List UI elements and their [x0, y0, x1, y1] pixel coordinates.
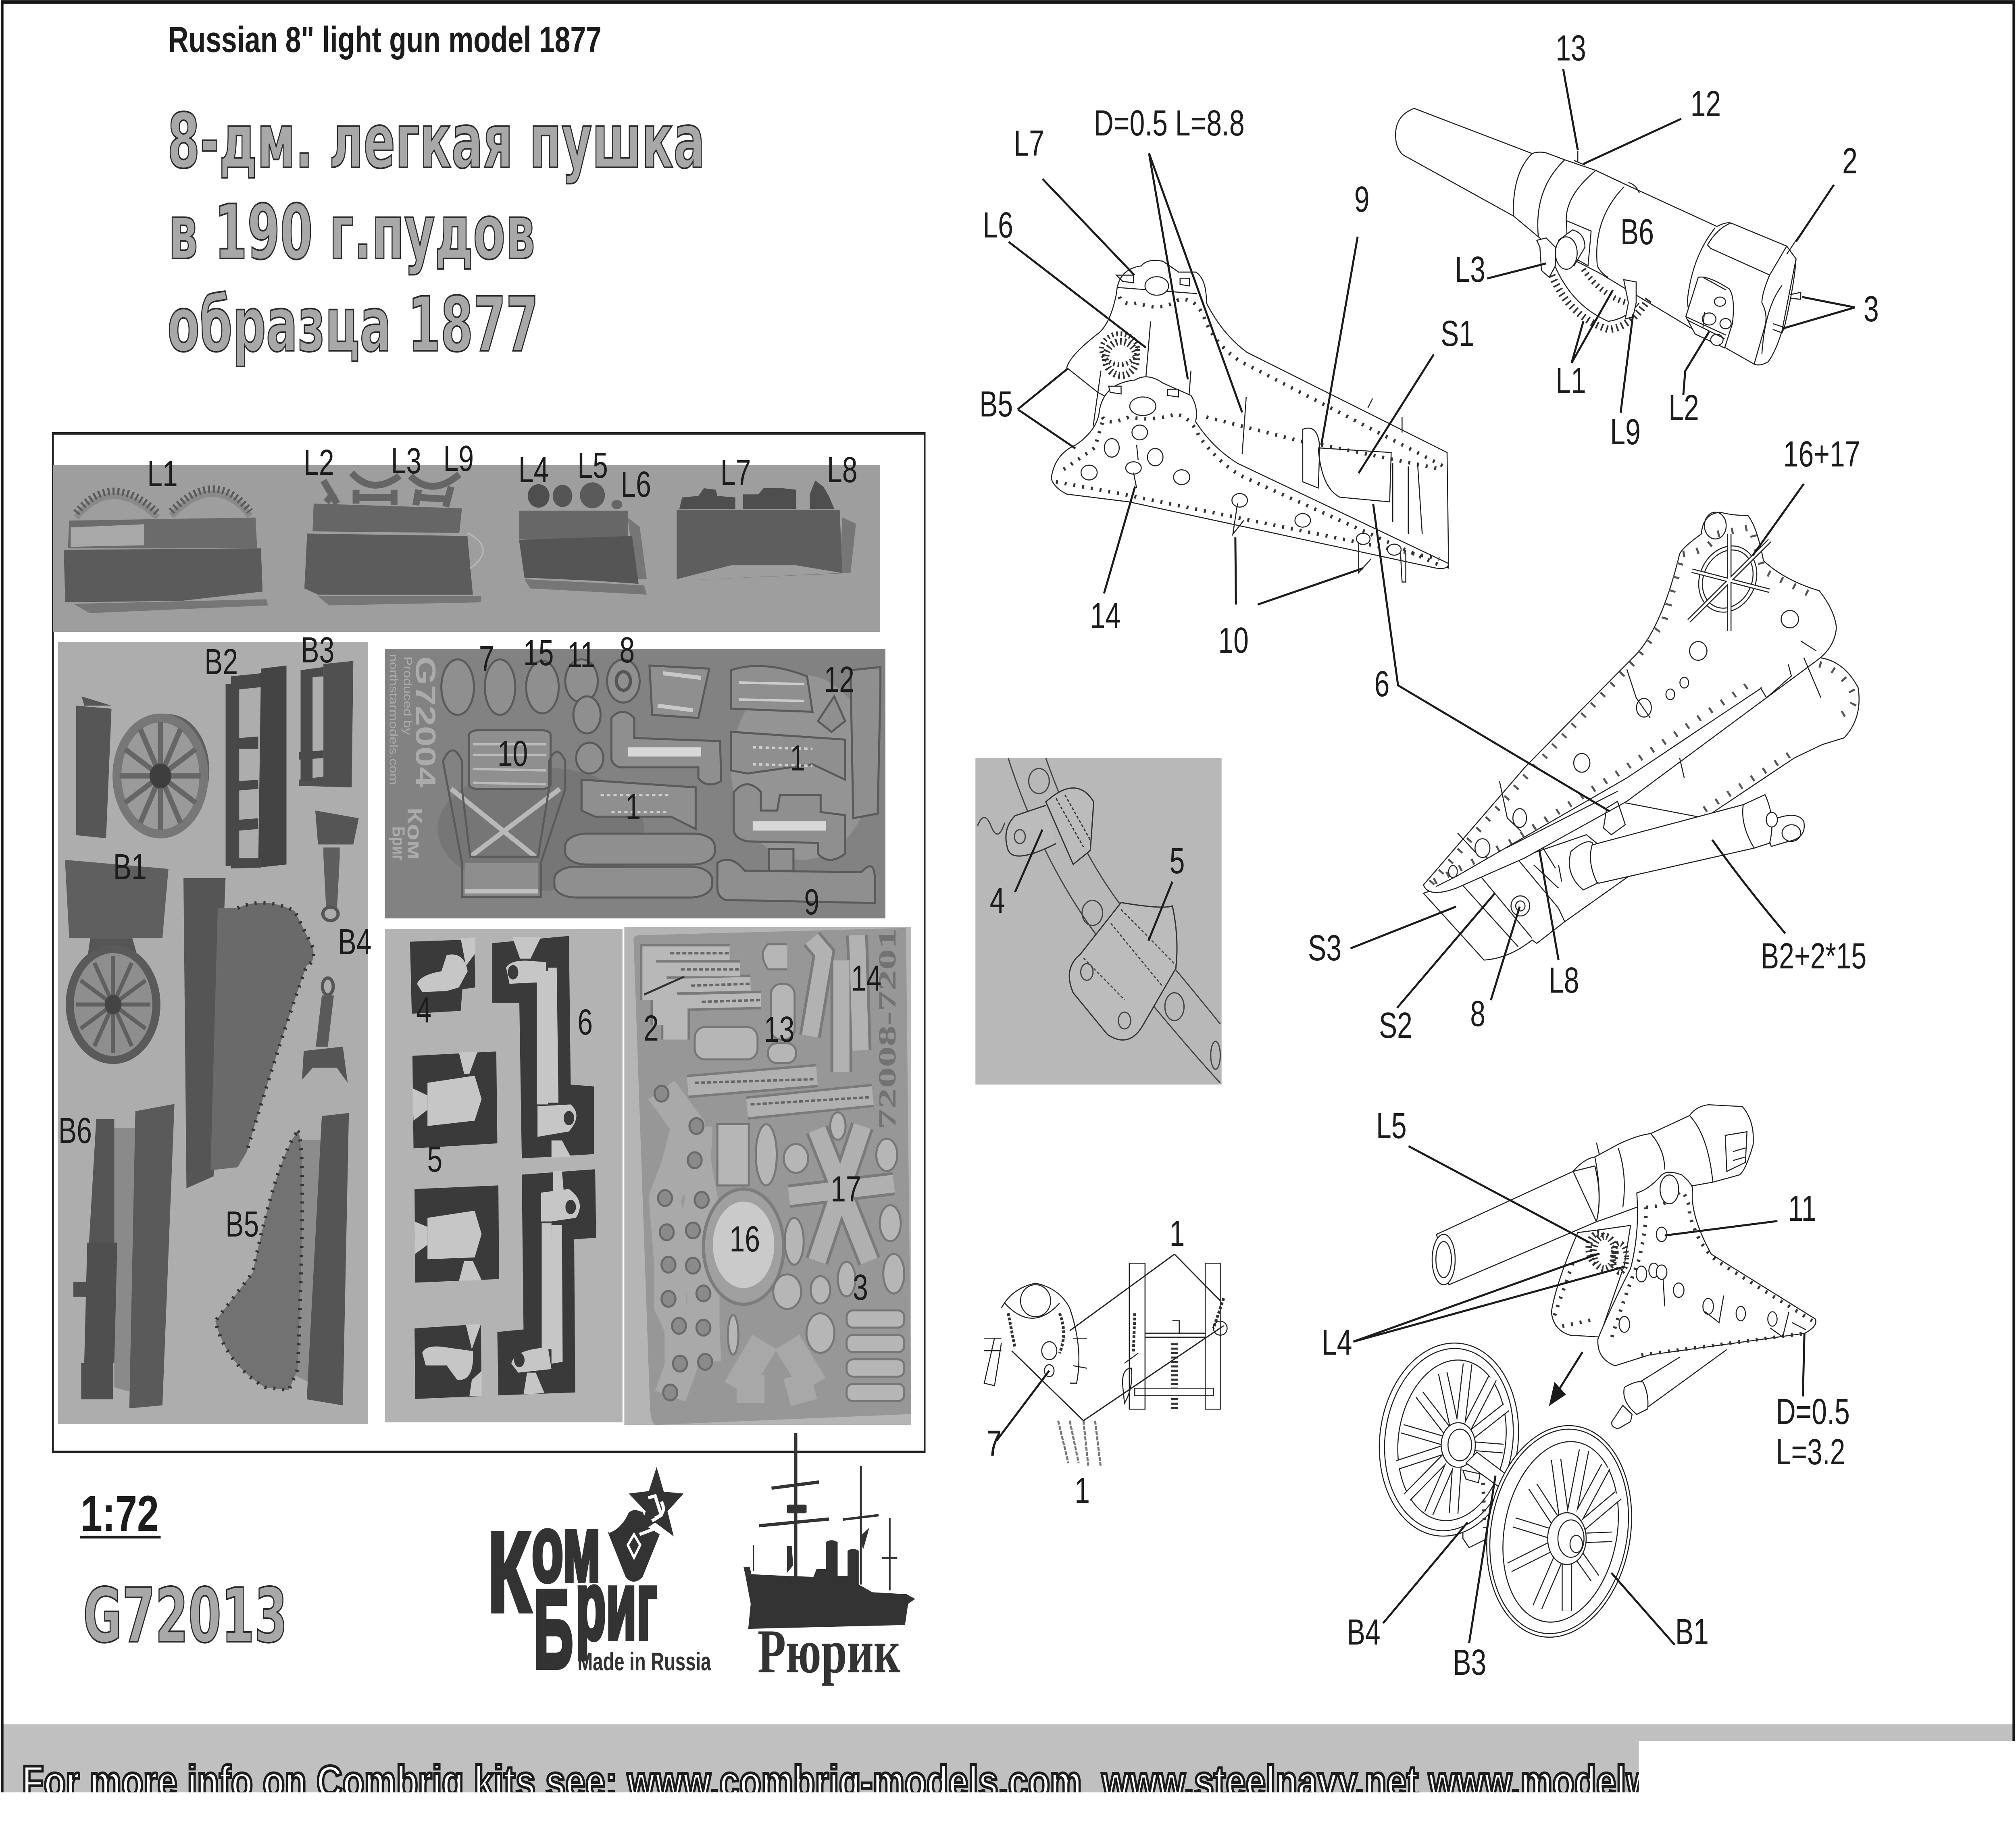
diagram: assembled gun [1322, 1105, 1850, 1682]
labels: carriage: L8 [1549, 960, 1579, 1000]
labels: trail: D=0.5 L=8.8 [1094, 103, 1245, 143]
labels: carriage: S2 [1379, 1005, 1412, 1045]
logo: Kombrig [488, 1467, 711, 1691]
labels: resin parts: L4 [519, 450, 549, 490]
labels: barrel: L1 [1556, 360, 1586, 401]
title: образца 1877 [167, 281, 539, 369]
labels: trail [979, 103, 1474, 660]
labels: trail: L6 [983, 205, 1013, 245]
labels: barrel: L2 [1668, 387, 1699, 428]
photo: resin parts L1-L9 [53, 438, 880, 632]
labels: trail: L7 [1014, 123, 1044, 163]
labels: etch sheet: 1 [790, 738, 805, 778]
labels: resin parts: L5 [577, 445, 608, 485]
labels: barrel: 13 [1556, 28, 1586, 68]
labels: etch sheet: 12 [824, 659, 854, 699]
labels: carriage: B2+2*15 [1761, 936, 1866, 976]
labels: B parts: B6 [58, 1110, 92, 1151]
labels: detail: 4 [990, 880, 1005, 920]
labels: parts 4, 5, 6: 5 [427, 1139, 442, 1179]
labels: chain fittings: 1 [1075, 1470, 1090, 1511]
etched text: sheet number: Ком [403, 808, 427, 860]
etched text: sheet number [387, 654, 441, 861]
labels: etch sheet: 10 [498, 733, 528, 774]
logo: Rurik ship: Рюрик [758, 1617, 900, 1686]
diagram: chain fittings [984, 1213, 1227, 1511]
labels: resin parts: L1 [147, 454, 178, 494]
title: 8-дм. легкая пушка [167, 98, 705, 185]
labels: etch sheet 2: 2 [644, 1008, 659, 1048]
title [167, 98, 705, 369]
labels: assembled gun [1322, 1105, 1850, 1682]
labels: etch sheet [479, 630, 854, 922]
labels: B parts: B2 [204, 641, 238, 682]
labels: carriage: 6 [1375, 664, 1389, 704]
diagram: gun barrel [1395, 28, 1879, 452]
labels: etch sheet: 11 [567, 635, 596, 675]
labels: carriage [1308, 434, 1866, 1045]
labels: detail: 5 [1170, 841, 1185, 881]
labels: parts 4, 5, 6: 6 [577, 1002, 593, 1042]
kit number: G72013 [83, 1572, 287, 1659]
photo: photo-etch sheet 72008 [624, 927, 911, 1425]
labels: trail: 9 [1354, 179, 1370, 219]
labels: barrel: 3 [1864, 289, 1879, 329]
labels: etch sheet 2 [644, 958, 881, 1307]
labels: trail: S1 [1441, 313, 1474, 354]
labels: assembled gun: 11 [1788, 1188, 1816, 1228]
labels: trail: 14 [1090, 595, 1120, 636]
labels: resin parts [147, 438, 858, 504]
labels: etch sheet: 7 [479, 639, 494, 679]
labels: barrel [1455, 28, 1879, 452]
labels: detail [990, 841, 1185, 920]
labels: etch sheet: 9 [804, 882, 819, 922]
logo: Kombrig: Made in Russia [577, 1647, 711, 1676]
photo: resin parts B1-B6 [58, 630, 371, 1424]
diagram: trail assembly [979, 103, 1474, 660]
labels: resin parts: L7 [721, 452, 751, 493]
labels: assembled gun: L4 [1322, 1322, 1352, 1362]
labels: barrel: L9 [1610, 412, 1641, 452]
photo: drawing detail of parts 4 and 5 [975, 758, 1222, 1085]
logo: Kombrig: Б [534, 1567, 573, 1691]
labels: barrel: L3 [1455, 249, 1485, 289]
labels: assembled gun: B4 [1347, 1612, 1381, 1652]
photo: etched parts 4, 5, 6 [385, 929, 623, 1422]
labels: chain fittings: 7 [986, 1423, 1002, 1464]
labels: chain fittings: 1 [1170, 1213, 1185, 1253]
labels: parts 4, 5, 6: 4 [416, 990, 431, 1030]
labels: etch sheet 2: 16 [730, 1219, 760, 1259]
labels: resin parts: L6 [621, 464, 651, 504]
labels: trail: 10 [1218, 620, 1249, 660]
labels: assembled gun: B1 [1675, 1611, 1709, 1652]
etched text: sheet number: Бриг [389, 826, 408, 861]
labels: resin parts: L9 [443, 438, 474, 479]
scale: 1:72 [81, 1486, 159, 1542]
labels: assembled gun: B3 [1453, 1642, 1486, 1682]
labels: parts 4, 5, 6 [416, 990, 593, 1179]
labels: etch sheet: 8 [619, 630, 635, 670]
labels: carriage: 8 [1470, 993, 1485, 1034]
photo: photo-etch sheet G72004 [385, 630, 885, 922]
labels: carriage: 16+17 [1783, 434, 1860, 474]
logo: Kombrig: риг [576, 1552, 657, 1660]
etched text: sheet number: 72008-7201 [873, 928, 901, 1130]
logo: Kombrig: К [488, 1509, 531, 1635]
etched text: sheet number: Produced by [401, 656, 414, 735]
labels: assembled gun: L=3.2 [1776, 1432, 1845, 1472]
labels: B parts: B5 [225, 1204, 259, 1244]
labels: barrel: 12 [1691, 83, 1721, 124]
labels: etch sheet 2: 17 [831, 1169, 861, 1209]
labels: etch sheet: 15 [523, 633, 554, 673]
labels: assembled gun: L5 [1376, 1105, 1407, 1146]
etched text: sheet number: G72004 [410, 656, 441, 787]
labels: trail: B5 [979, 384, 1013, 424]
labels: B parts: B3 [301, 630, 334, 670]
subtitle: Russian 8" light gun model 1877 [168, 19, 602, 60]
labels: assembled gun: D=0.5 [1776, 1391, 1850, 1432]
logo: Kombrig: ом [532, 1496, 601, 1601]
labels: barrel: 2 [1842, 141, 1858, 181]
labels: etch sheet 2: 13 [764, 1009, 794, 1049]
labels: B parts [58, 630, 371, 1244]
footer bar [2, 1724, 2014, 1828]
footer text: For more info on Combrig kits see: www.combrig-models.com www.steelnavy.net www.modelwarships.com [22, 1757, 1865, 1807]
panel: kit photographs [53, 433, 925, 1452]
labels: carriage: S3 [1308, 928, 1341, 968]
etched text: sheet number: northstarmodels.com [387, 654, 400, 785]
logo: Rurik ship [744, 1433, 915, 1686]
labels: chain fittings [986, 1213, 1185, 1511]
diagram: carriage underside [1308, 434, 1866, 1045]
labels: etch sheet: 1 [625, 787, 641, 827]
arrow [1549, 1382, 1566, 1406]
labels: barrel: B6 [1620, 212, 1654, 252]
icon: star [629, 1467, 684, 1536]
labels: B parts: B4 [338, 922, 371, 962]
labels: B parts: B1 [113, 847, 147, 887]
labels: resin parts: L3 [391, 441, 421, 481]
labels: etch sheet 2: 14 [851, 958, 881, 998]
labels: resin parts: L8 [827, 450, 858, 490]
title: в 190 г.пудов [168, 189, 535, 277]
labels: resin parts: L2 [304, 442, 334, 483]
labels: etch sheet 2: 3 [853, 1267, 868, 1307]
